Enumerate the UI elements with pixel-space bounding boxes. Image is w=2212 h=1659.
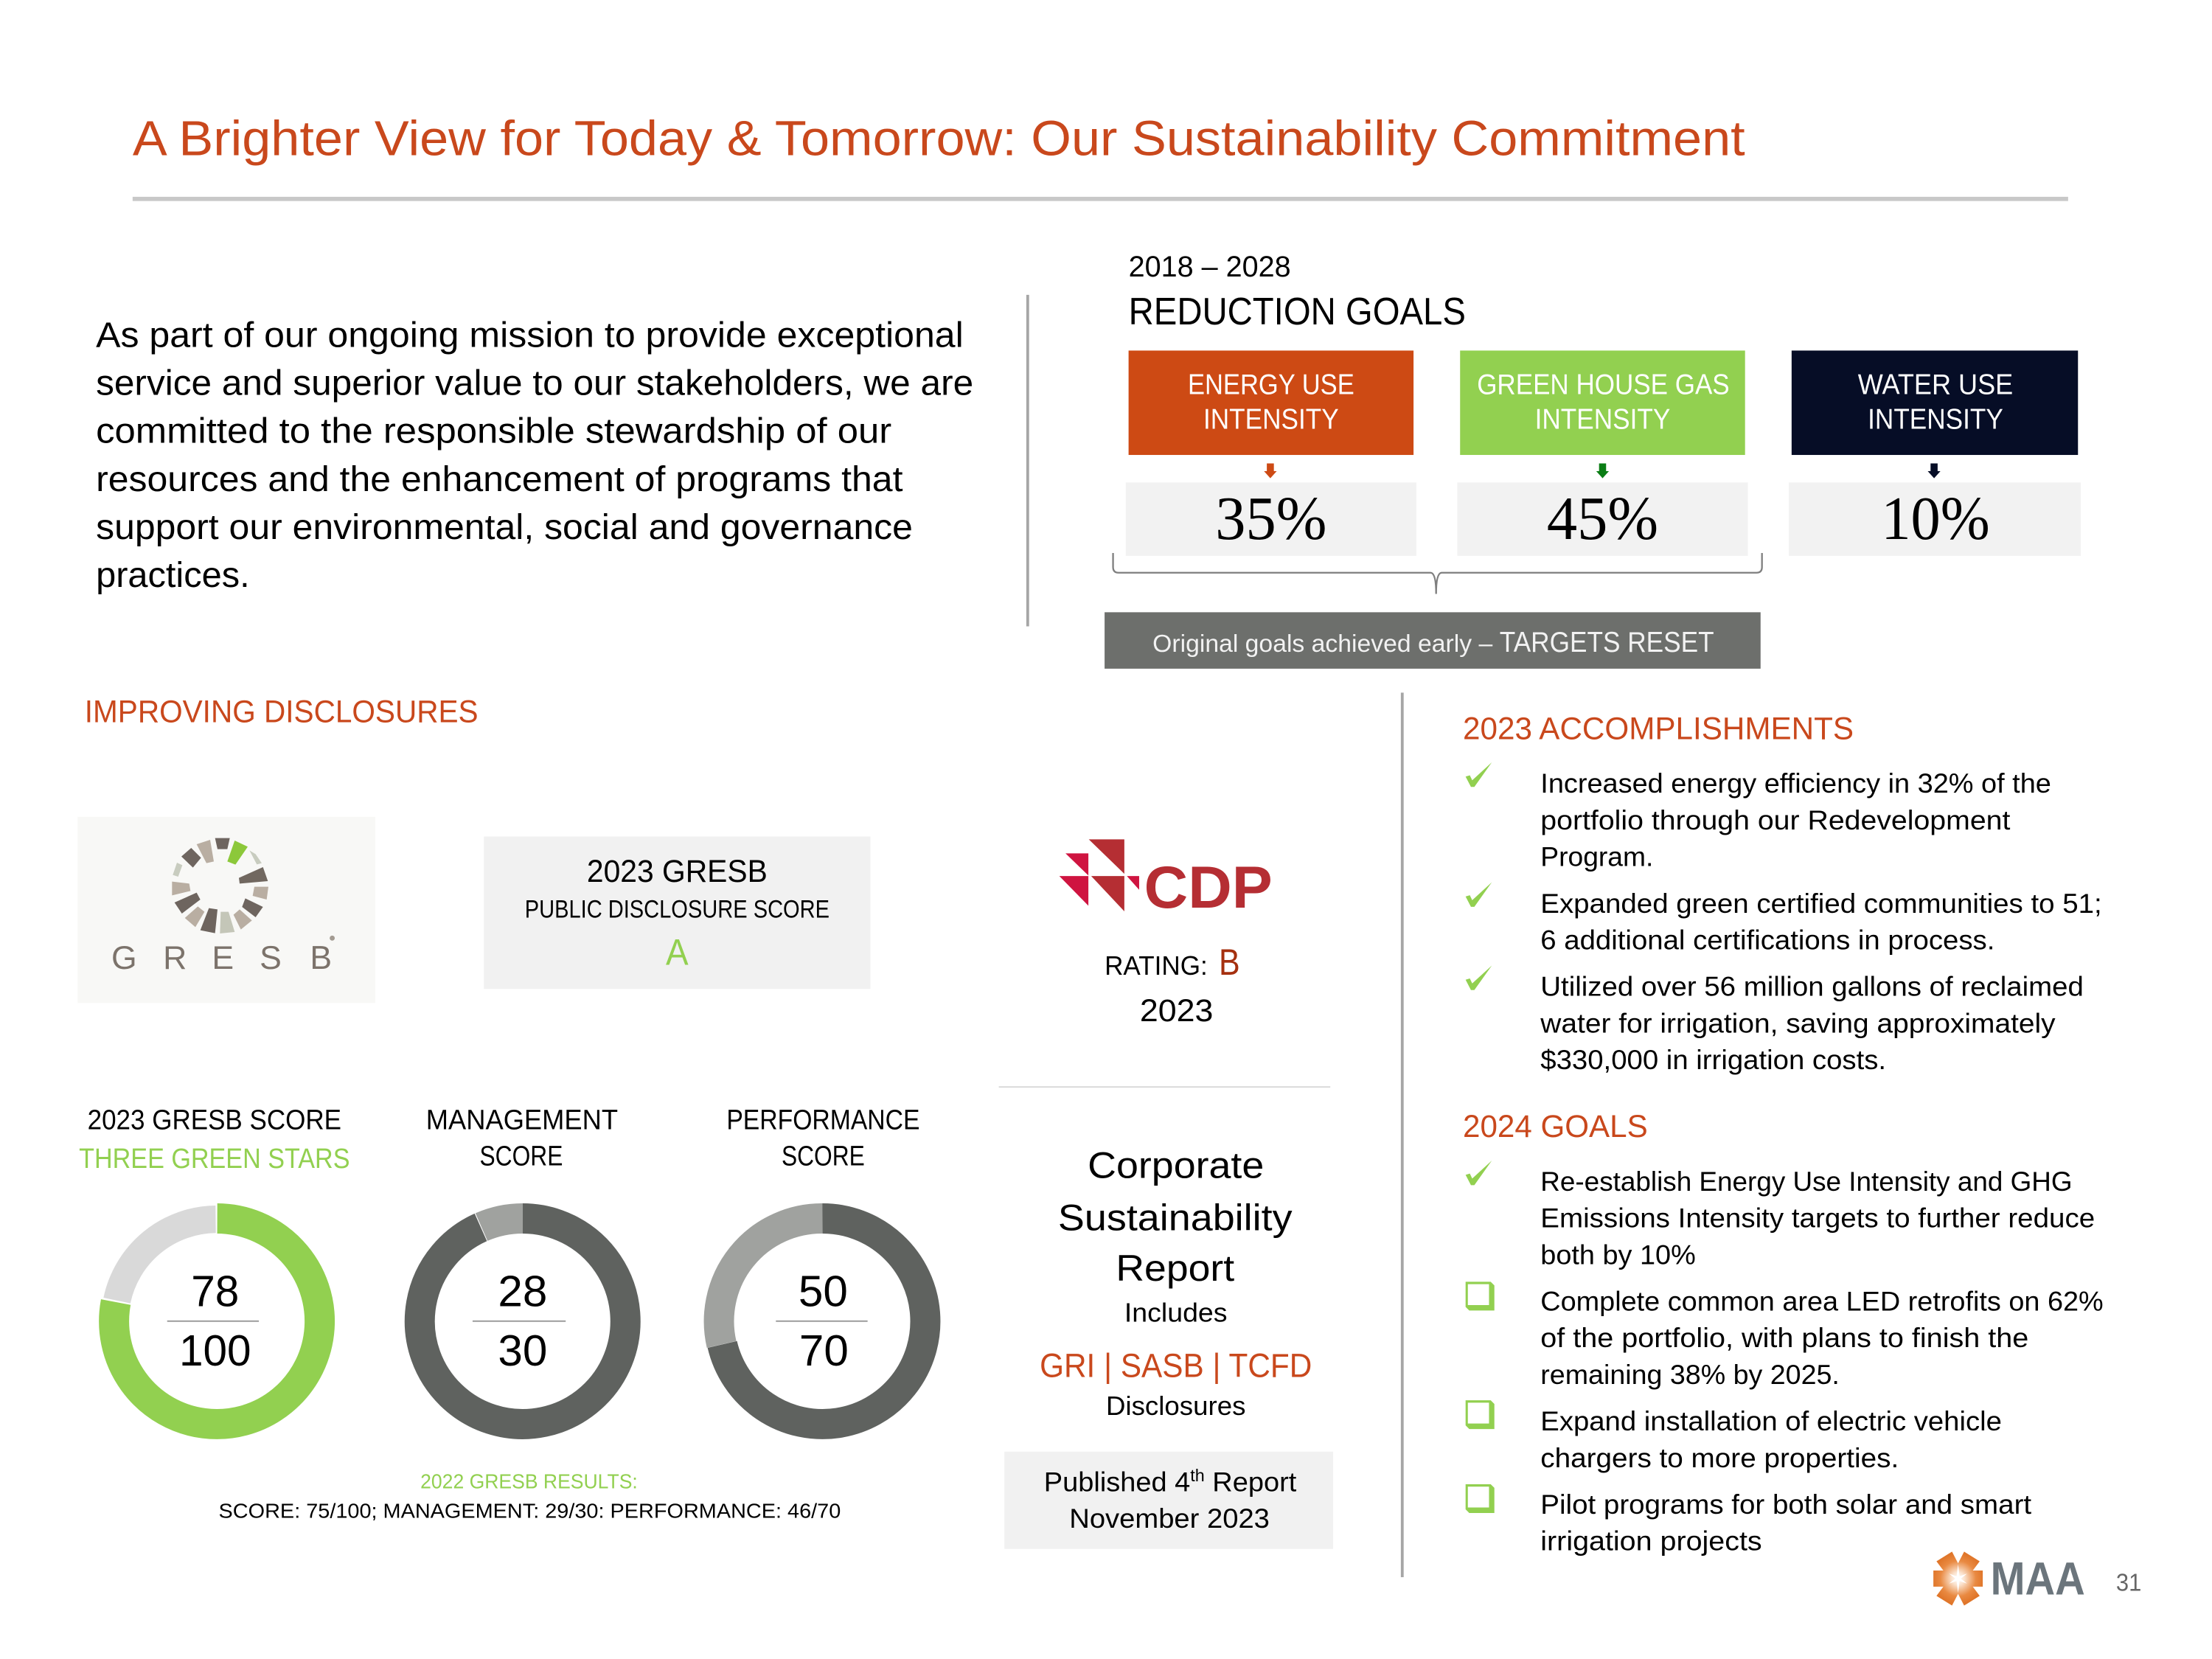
corporate sustainability report text: Includes (1124, 1298, 1228, 1328)
donut chart: performance score (719, 1105, 925, 1424)
targets reset banner (1105, 612, 1761, 669)
goal: water use intensity (1789, 350, 2081, 556)
goal: green house gas intensity: GREEN HOUSE GAS (1477, 369, 1730, 401)
goal: re-establish targets: Emissions Intensity targets to further reduce (1540, 1203, 2095, 1234)
CDP logo: CDP (1144, 855, 1273, 921)
goal: LED retrofits: remaining 38% by 2025. (1540, 1359, 1840, 1390)
reduction goals heading (1129, 250, 1466, 333)
goal: electric vehicle chargers: Expand installation of electric vehicle (1540, 1405, 2002, 1436)
donut chart: management score: MANAGEMENT (426, 1105, 618, 1136)
targets reset banner: Original goals achieved early – (1152, 630, 1493, 658)
goal: solar and smart irrigation pilots: Pilot programs for both solar and smart (1540, 1489, 2032, 1520)
accomplishment: green certified communities: Expanded green certified communities to 51; (1540, 888, 2102, 919)
goal: water use intensity: 10% (1881, 484, 1990, 553)
published report callout (1004, 1452, 1333, 1549)
donut chart: management score: SCORE (480, 1140, 563, 1172)
mission statement text block (96, 316, 973, 595)
donut chart: management score (420, 1105, 625, 1424)
goal: electric vehicle chargers: chargers to more properties. (1540, 1442, 1899, 1473)
mission statement text block: support our environmental, social and governance (96, 508, 913, 547)
donut chart: 2023 GRESB score: THREE GREEN STARS (79, 1143, 349, 1175)
donut chart: performance score: 70 (799, 1326, 849, 1375)
panel: 2024 goals (1463, 1109, 2104, 1557)
2022 GRESB results note: 2022 GRESB RESULTS: (420, 1470, 638, 1492)
accomplishment: reclaimed water: Utilized over 56 million gallons of reclaimed (1540, 971, 2084, 1002)
CDP rating: B (1219, 942, 1240, 983)
reduction goals heading: 2018 – 2028 (1129, 250, 1291, 283)
GRESB logo: GRESB (111, 940, 332, 976)
accomplishment: energy efficiency: Increased energy efficiency in 32% of the (1540, 768, 2051, 799)
goal: electric vehicle chargers (1466, 1400, 2002, 1473)
GRESB logo (77, 817, 375, 1003)
goal: energy use intensity: 35% (1215, 484, 1326, 553)
title: A Brighter View for Today & Tomorrow: Our Sustainability Commitment (133, 111, 1745, 166)
donut chart: 2023 GRESB score: 100 (179, 1326, 251, 1375)
GRESB public disclosure score card: PUBLIC DISCLOSURE SCORE (525, 896, 830, 924)
accomplishments heading: 2023 ACCOMPLISHMENTS (1463, 712, 1854, 747)
corporate sustainability report text: Report (1116, 1248, 1234, 1289)
title rule (133, 197, 2068, 201)
mission statement text block: practices. (96, 556, 250, 595)
mission statement text block: committed to the responsible stewardship of our (96, 412, 891, 451)
CDP logo (1060, 839, 1273, 921)
accomplishment: green certified communities (1466, 883, 2102, 956)
donut chart: 2023 GRESB score (79, 1105, 349, 1424)
donut chart: performance score: PERFORMANCE (726, 1105, 919, 1136)
improving disclosures heading: IMPROVING DISCLOSURES (85, 695, 479, 730)
corporate sustainability report text: Sustainability (1058, 1197, 1293, 1238)
published report callout: Published 4 (1044, 1466, 1188, 1497)
2022 GRESB results note: SCORE: 75/100; MANAGEMENT: 29/30: PERFORMANCE: 46/70 (219, 1500, 841, 1523)
goal: LED retrofits: Complete common area LED retrofits on 62% (1540, 1285, 2104, 1316)
mission statement text block: As part of our ongoing mission to provide exceptional (96, 316, 964, 355)
mission statement text block: service and superior value to our stakeholders, we are (96, 364, 973, 403)
published report callout: November 2023 (1069, 1503, 1270, 1534)
goal: re-establish targets (1466, 1161, 2095, 1270)
goal: solar and smart irrigation pilots: irrigation projects (1540, 1526, 1762, 1557)
goal: green house gas intensity: 45% (1547, 484, 1658, 553)
goal: re-establish targets: Re-establish Energy Use Intensity and GHG (1540, 1166, 2073, 1197)
donut chart: 2023 GRESB score: 2023 GRESB SCORE (88, 1105, 341, 1136)
goal: LED retrofits (1466, 1281, 2104, 1390)
published report callout: Report (1205, 1466, 1297, 1497)
panel: reduction goals (1105, 250, 2081, 669)
CDP rating (1105, 942, 1240, 1029)
CDP rating: RATING: (1105, 950, 1208, 981)
brace grouping energy and GHG goals (1113, 553, 1762, 594)
published report callout: th (1190, 1466, 1205, 1485)
donut chart: management score: 28 (498, 1267, 547, 1316)
2024 goals heading: 2024 GOALS (1463, 1109, 1648, 1144)
donut chart: performance score: 50 (799, 1267, 848, 1316)
accomplishment: reclaimed water (1466, 965, 2084, 1075)
accomplishment: energy efficiency (1466, 762, 2051, 872)
goal: energy use intensity: INTENSITY (1203, 403, 1339, 436)
targets reset banner: TARGETS RESET (1500, 626, 1714, 658)
donut chart: management score: 30 (498, 1326, 547, 1375)
goal: LED retrofits: of the portfolio, with plans to finish the (1540, 1322, 2028, 1353)
GRESB public disclosure score card: A (666, 932, 689, 973)
goal: energy use intensity (1126, 350, 1416, 556)
corporate sustainability report text (1040, 1145, 1312, 1421)
accomplishment: energy efficiency: Program. (1540, 841, 1653, 872)
accomplishment: reclaimed water: $330,000 in irrigation costs. (1540, 1044, 1886, 1075)
GRESB public disclosure score card: 2023 GRESB (587, 854, 768, 889)
accomplishment: energy efficiency: portfolio through our Redevelopment (1540, 804, 2011, 835)
goal: green house gas intensity (1457, 350, 1748, 556)
corporate sustainability report text: GRI | SASB | TCFD (1040, 1346, 1312, 1384)
panel: 2023 accomplishments (1463, 712, 2102, 1075)
donut chart: 2023 GRESB score: 78 (191, 1267, 239, 1316)
2022 GRESB results note (219, 1470, 841, 1523)
CDP rating: 2023 (1140, 993, 1213, 1029)
page number: 31 (2116, 1569, 2141, 1596)
donut chart: performance score: SCORE (782, 1140, 865, 1172)
goal: solar and smart irrigation pilots (1466, 1484, 2032, 1557)
corporate sustainability report text: Disclosures (1106, 1391, 1245, 1421)
goal: re-establish targets: both by 10% (1540, 1239, 1696, 1270)
MAA logo (1933, 1551, 2085, 1606)
goal: water use intensity: WATER USE (1858, 369, 2013, 401)
accomplishment: green certified communities: 6 additional certifications in process. (1540, 925, 1994, 956)
goal: water use intensity: INTENSITY (1868, 403, 2003, 436)
accomplishment: reclaimed water: water for irrigation, saving approximately (1540, 1008, 2056, 1039)
mission statement text block: resources and the enhancement of programs that (96, 460, 902, 499)
corporate sustainability report text: Corporate (1088, 1145, 1264, 1186)
panel: improving disclosures (77, 695, 1333, 1549)
goal: green house gas intensity: INTENSITY (1535, 403, 1670, 436)
GRESB public disclosure score card (484, 837, 870, 989)
reduction goals heading: REDUCTION GOALS (1129, 290, 1466, 333)
goal: energy use intensity: ENERGY USE (1188, 369, 1354, 401)
MAA logo: MAA (1991, 1554, 2085, 1605)
